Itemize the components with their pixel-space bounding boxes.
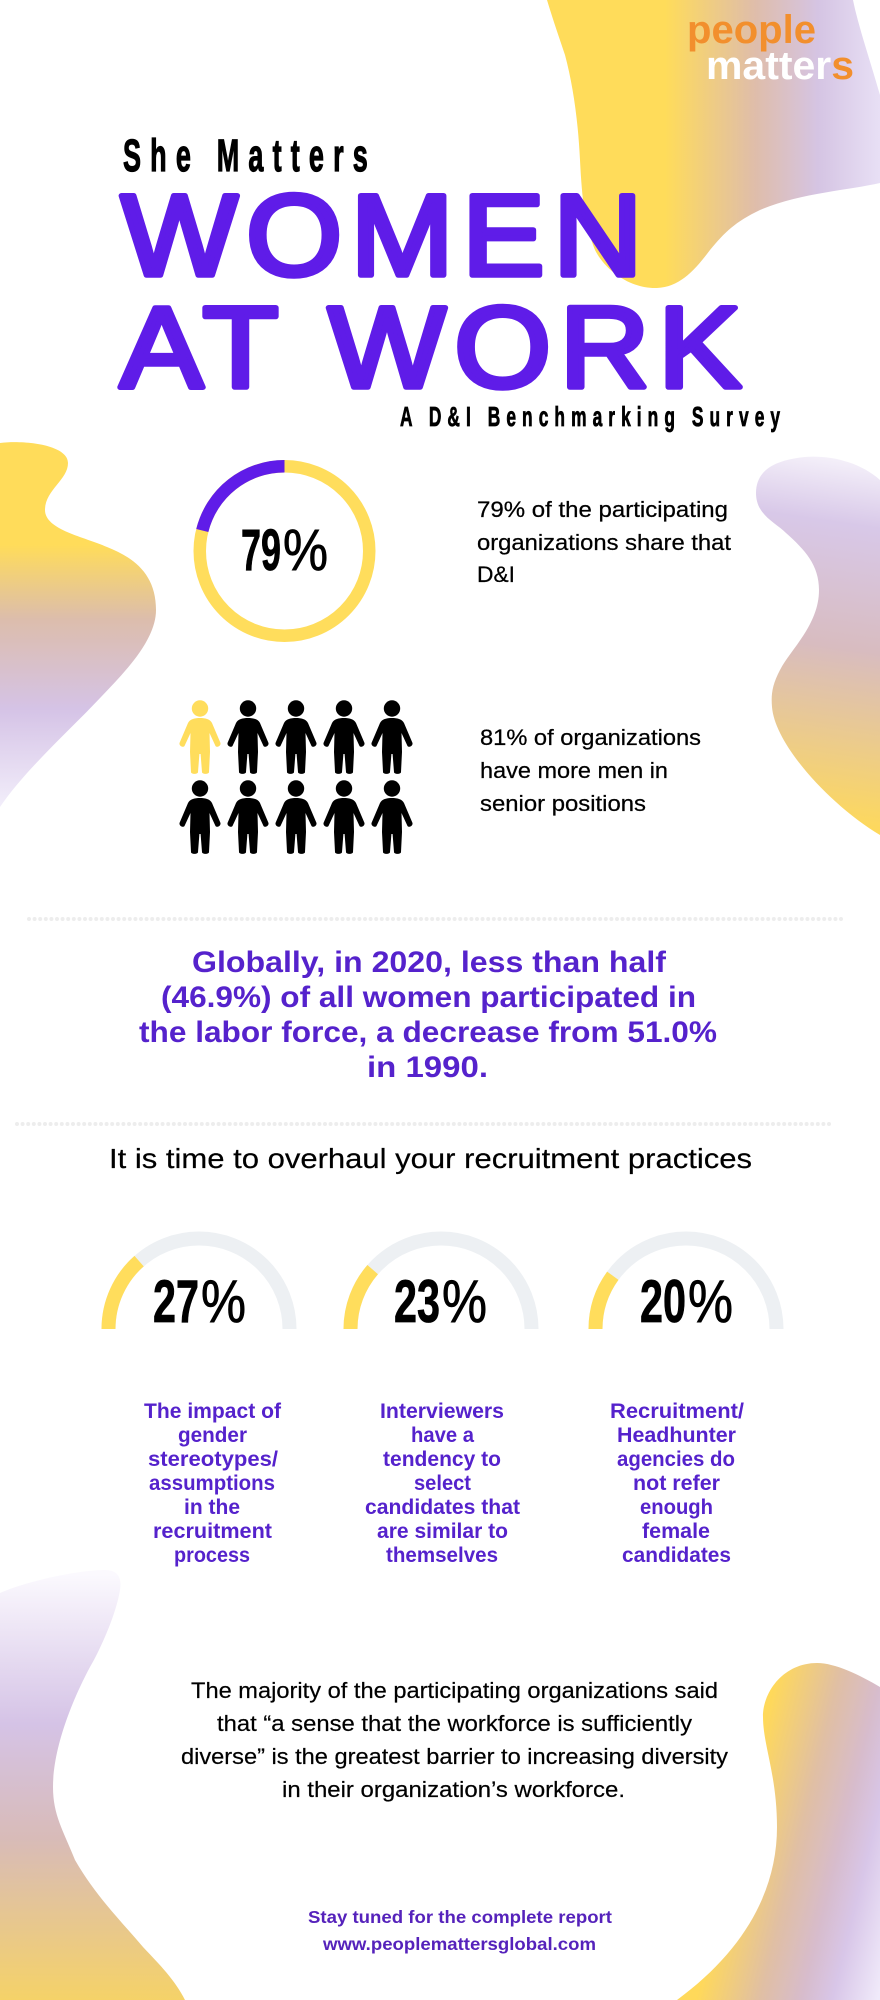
text block: gauge 1 caption: process <box>174 1544 250 1567</box>
text block: greatest barrier statement: The majority of the participating organizations said <box>191 1678 718 1703</box>
gauge: 27%: 27 <box>153 1268 199 1335</box>
text block: greatest barrier statement: in their organization’s workforce. <box>282 1777 625 1802</box>
text block: gauge 3 caption: candidates <box>622 1544 731 1567</box>
footer: report call to action: www.peoplemattersglobal.com <box>322 1934 596 1954</box>
background blob: right <box>756 457 880 835</box>
text block: 81% statement: senior positions <box>480 791 646 816</box>
logo: people matters <box>687 8 854 88</box>
eyebrow: She Matters: She Matters <box>123 130 368 181</box>
text block: gauge 1 caption: recruitment <box>153 1520 272 1543</box>
text block: gauge 3 caption: female <box>642 1520 710 1543</box>
text block: gauge 2 caption: tendency to <box>383 1448 501 1471</box>
donut value: 79 <box>241 518 281 583</box>
gauge: 23%: 23 <box>394 1268 440 1335</box>
gauge: 23%: % <box>442 1268 487 1335</box>
heading: WOMEN: WOMEN <box>121 172 651 300</box>
callout: global participation statistic <box>139 946 717 1084</box>
text block: 79% statement: organizations share that <box>477 530 731 555</box>
subtitle: A D&I Benchmarking Survey <box>400 401 780 432</box>
gauge: 20% <box>596 1238 776 1335</box>
text block: gauge 2 caption: candidates that <box>365 1496 520 1519</box>
text block: gauge 2 caption: select <box>414 1472 471 1495</box>
callout: global participation statistic: the labor force, a decrease from 51.0% <box>139 1016 717 1049</box>
text block: gauge 3 caption <box>610 1400 744 1567</box>
background blob: bottom right <box>677 1663 880 2000</box>
donut value: % <box>283 518 328 583</box>
text block: 79% statement <box>477 497 731 587</box>
text block: gauge 1 caption: gender <box>178 1424 247 1447</box>
callout: global participation statistic: (46.9%) of all women participated in <box>161 981 696 1014</box>
donut chart: 79% <box>200 466 369 636</box>
text block: 81% statement: 81% of organizations <box>480 725 701 750</box>
logo: people matters: matters <box>706 44 854 88</box>
pictogram: ten people, one highlighted <box>179 700 413 854</box>
text block: gauge 2 caption: have a <box>411 1424 474 1447</box>
text block: gauge 1 caption <box>144 1400 282 1567</box>
heading: recruitment practices: It is time to overhaul your recruitment practices <box>109 1143 752 1174</box>
text block: gauge 1 caption: in the <box>184 1496 240 1519</box>
background blob: bottom left <box>0 1570 185 2000</box>
text block: gauge 1 caption: assumptions <box>149 1472 275 1495</box>
text block: gauge 3 caption: agencies do <box>617 1448 735 1471</box>
gauge: 23% <box>350 1238 532 1335</box>
gauge: 20%: % <box>688 1268 733 1335</box>
footer: report call to action <box>308 1907 612 1954</box>
text block: 81% statement: have more men in <box>480 758 668 783</box>
gauge: 20%: 20 <box>640 1268 686 1335</box>
text block: greatest barrier statement <box>181 1678 728 1802</box>
logo: people matters: people <box>687 8 816 52</box>
text block: 79% statement: 79% of the participating <box>477 497 728 522</box>
text block: 79% statement: D&I <box>477 562 515 587</box>
callout: global participation statistic: Globally, in 2020, less than half <box>192 946 667 979</box>
text block: greatest barrier statement: that “a sense that the workforce is sufficiently <box>217 1711 692 1736</box>
text block: gauge 3 caption: Recruitment/ <box>610 1400 744 1423</box>
text block: 81% statement <box>480 725 701 816</box>
text block: gauge 2 caption: themselves <box>386 1544 498 1567</box>
text block: gauge 2 caption: are similar to <box>377 1520 508 1543</box>
heading: AT WORK: AT WORK <box>120 284 750 412</box>
text block: gauge 2 caption: Interviewers <box>380 1400 504 1423</box>
text block: gauge 1 caption: The impact of <box>144 1400 282 1423</box>
background blob: left <box>0 442 156 807</box>
text block: gauge 3 caption: enough <box>640 1496 713 1519</box>
footer: report call to action: Stay tuned for the complete report <box>308 1907 612 1927</box>
text block: gauge 3 caption: Headhunter <box>617 1424 736 1447</box>
title block <box>120 130 780 432</box>
text block: gauge 2 caption <box>365 1400 520 1567</box>
gauge: 27% <box>108 1238 290 1335</box>
text block: greatest barrier statement: diverse” is the greatest barrier to increasing diversity <box>181 1744 728 1769</box>
gauge: 27%: % <box>201 1268 246 1335</box>
callout: global participation statistic: in 1990. <box>367 1051 488 1084</box>
text block: gauge 1 caption: stereotypes/ <box>148 1448 278 1471</box>
background blob: top right <box>547 0 880 288</box>
text block: gauge 3 caption: not refer <box>633 1472 720 1495</box>
